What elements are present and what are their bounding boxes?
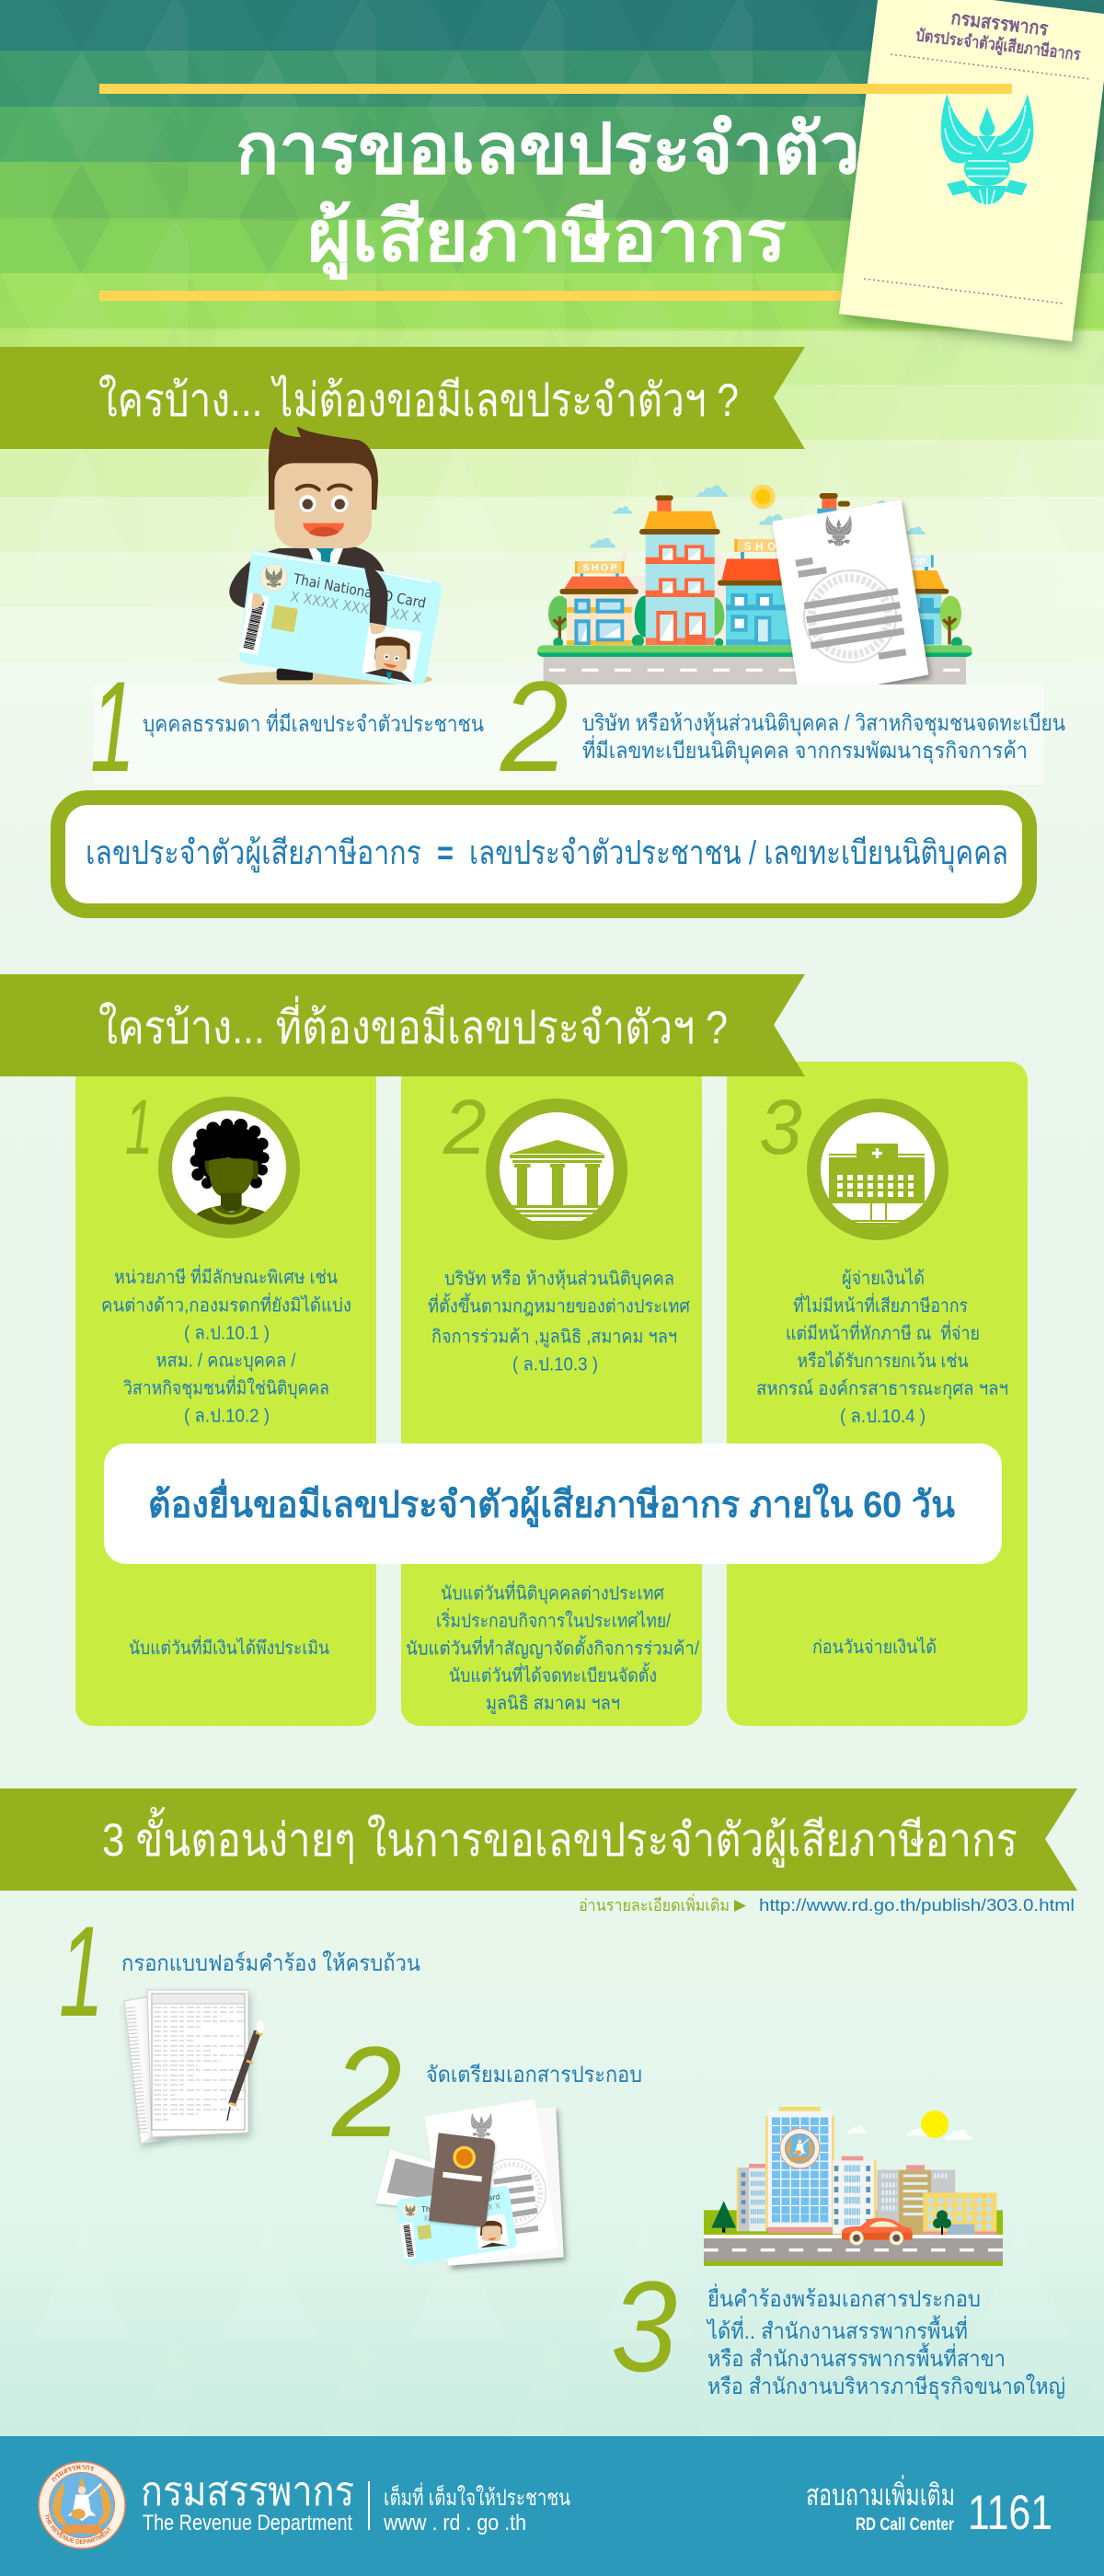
icon: man holding national id card: Thai National ID Card — [292, 570, 427, 612]
title: ผู้เสียภาษีอากร — [307, 198, 787, 280]
title — [236, 110, 860, 280]
text: deadline start: นับแต่วันที่มีเงินได้พึงประเมิน — [129, 1635, 329, 1659]
pale strip behind numbered notes — [93, 684, 1044, 785]
formula callout — [51, 790, 1037, 918]
link: read more — [579, 1893, 1075, 1915]
panel: income payers — [727, 1062, 1028, 1726]
step 3: 3 — [611, 2254, 677, 2398]
icon: garuda emblem — [941, 94, 1033, 207]
card heading: กรมสรรพากร — [949, 6, 1050, 40]
tax id card document — [839, 0, 1104, 341]
step 3: หรือ สำนักงานสรรพากรพื้นที่สาขา — [707, 2342, 1006, 2372]
icon: revenue department seal — [38, 2461, 126, 2549]
section banner: who must apply — [0, 974, 805, 1076]
department name: The Revenue Department — [143, 2511, 352, 2536]
text: description: บริษัท หรือ ห้างหุ้นส่วนนิติบุคคล — [444, 1269, 674, 1290]
panel: foreign companies — [401, 1062, 702, 1726]
deadline callout — [104, 1443, 1002, 1564]
text: description: ที่ตั้งขึ้นตามกฎหมายของต่างประเทศ — [428, 1294, 690, 1317]
number 3: 3 — [759, 1084, 802, 1170]
icon: revenue office city scene — [704, 2107, 1003, 2266]
text: description — [101, 1264, 351, 1427]
step 1: กรอกแบบฟอร์มคำร้อง ให้ครบถ้วน — [121, 1950, 420, 1976]
panel: special tax units — [75, 1062, 376, 1726]
text: description: สหกรณ์ องค์กรสาธารณะกุศล ฯลฯ — [756, 1378, 1008, 1400]
lower yellow title bar — [99, 291, 854, 301]
call center: RD Call Center — [856, 2515, 954, 2535]
text: description: หสม. / คณะบุคคล / — [156, 1351, 296, 1373]
note 2: companies and partnerships — [500, 654, 1065, 799]
icon: shops and company registration paper: OP — [912, 557, 926, 568]
deadline callout: ต้องยื่นขอมีเลขประจำตัวผู้เสียภาษีอากร ภายใน 60 วัน — [148, 1478, 955, 1527]
text: deadline start — [406, 1581, 699, 1715]
formula callout: = — [437, 834, 454, 871]
icon: man holding national id card — [218, 426, 442, 688]
text: description: ( ล.ป.10.3 ) — [512, 1354, 598, 1374]
text: deadline start: มูลนิธิ สมาคม ฯลฯ — [486, 1694, 620, 1715]
text: deadline start: นับแต่วันที่ได้จดทะเบียนจัดตั้ง — [449, 1662, 657, 1686]
text: description: แต่มีหน้าที่หักภาษี ณ ที่จ่าย — [786, 1320, 980, 1344]
text: description: คนต่างด้าว,กองมรดกที่ยังมิได้แบ่ง — [101, 1292, 351, 1316]
icon: revenue department seal: กรมสรรพากร — [52, 2465, 94, 2482]
text: deadline start: นับแต่วันที่นิติบุคคลต่างประเทศ — [441, 1581, 664, 1605]
icon: documents, house book and id card: X X — [488, 2202, 501, 2212]
step 3 — [611, 2107, 1065, 2400]
text: deadline start: นับแต่วันที่ทำสัญญาจัดตั้งกิจการร่วมค้า/ — [406, 1636, 699, 1660]
text: description: กิจการร่วมค้า ,มูลนิธิ ,สมาคม ฯลฯ — [431, 1327, 677, 1348]
department name: กรมสรรพากร — [141, 2469, 354, 2514]
text: description: วิสาหกิจชุมชนที่มิใช่นิติบุคคล — [123, 1375, 329, 1400]
section banner: who does not need to apply: ใครบ้าง... ไม่ต้องขอมีเลขประจำตัวฯ ? — [98, 374, 739, 426]
text: description: หน่วยภาษี ที่มีลักษณะพิเศษ เช่น — [114, 1264, 338, 1288]
icon: bank building — [493, 1106, 620, 1233]
icon: documents, house book and id card: X — [423, 2214, 429, 2223]
link: read more: http://www.rd.go.th/publish/303.0.html — [759, 1896, 1075, 1915]
icon: person with afro — [166, 1104, 293, 1231]
call center: 1161 — [968, 2486, 1052, 2540]
note 1: natural person — [90, 654, 484, 799]
number 2: 2 — [443, 1084, 487, 1170]
text: description — [756, 1268, 1008, 1427]
icon: revenue department seal: THE REVENUE DEPARTMENT — [44, 2513, 111, 2544]
text: description: ที่ไม่มีหน้าที่เสียภาษีอากร — [793, 1293, 968, 1317]
note 1: natural person: บุคคลธรรมดา ที่มีเลขประจำตัวประชาชน — [143, 708, 484, 738]
text: deadline start: ก่อนวันจ่ายเงินได้ — [812, 1637, 937, 1658]
section banner: who does not need to apply — [0, 347, 805, 449]
slogan and website: www . rd . go .th — [383, 2511, 526, 2536]
section banner: three steps — [0, 1788, 1077, 1891]
footer — [0, 2436, 1104, 2576]
icon: documents, house book and id card: ard — [488, 2192, 500, 2202]
icon: man holding national id card: X XXXX XXXXX XX X — [289, 589, 423, 627]
title: การขอเลขประจำตัว — [236, 110, 860, 189]
text: description: หรือได้รับการยกเว้น เช่น — [797, 1351, 969, 1372]
icon: forms and pen — [124, 1990, 264, 2144]
formula callout: เลขประจำตัวผู้เสียภาษีอากร — [86, 834, 421, 873]
step 1: 1 — [59, 1899, 104, 2043]
text: description: ( ล.ป.10.4 ) — [840, 1407, 926, 1427]
step 2: 2 — [331, 2019, 402, 2164]
text: description: ( ล.ป.10.1 ) — [184, 1323, 270, 1343]
section banner: who must apply: ใครบ้าง... ที่ต้องขอมีเลขประจำตัวฯ ? — [98, 996, 728, 1053]
text: description — [428, 1269, 690, 1374]
note 2: companies and partnerships: ที่มีเลขทะเบียนนิติบุคคล จากกรมพัฒนาธุรกิจการค้า — [582, 735, 1028, 765]
text: deadline start: เริ่มประกอบกิจการในประเทศไทย/ — [436, 1608, 671, 1632]
call center: สอบถามเพิ่มเติม — [806, 2475, 955, 2512]
note 2: companies and partnerships: 2 — [500, 654, 569, 799]
slogan and website — [383, 2482, 570, 2536]
step 3: ได้ที่.. สำนักงานสรรพากรพื้นที่ — [706, 2315, 968, 2344]
text: description: ( ล.ป.10.2 ) — [184, 1407, 270, 1427]
link: read more: อ่านรายละเอียดเพิ่มเติม — [579, 1893, 730, 1915]
upper yellow title bar — [99, 84, 1012, 94]
icon: documents, house book and id card: Th — [420, 2205, 431, 2214]
icon: shops and company registration paper: SHO — [744, 540, 776, 553]
slogan and website: เต็มที่ เต็มใจให้ประชาชน — [384, 2482, 570, 2511]
step 3: หรือ สำนักงานบริหารภาษีธุรกิจขนาดใหญ่ — [707, 2374, 1065, 2400]
icon: shops and company registration paper: SHOP — [582, 563, 617, 574]
step 2 — [331, 2019, 642, 2266]
text: description: ผู้จ่ายเงินได้ — [842, 1268, 925, 1290]
number 1: 1 — [125, 1084, 153, 1170]
step 1 — [59, 1899, 420, 2144]
department name — [141, 2469, 354, 2536]
icon: shops and company registration paper — [537, 485, 972, 685]
icon: documents, house book and id card — [375, 2099, 564, 2266]
call center — [806, 2475, 1052, 2540]
icon: hospital building — [813, 1106, 943, 1233]
step 3: ยื่นคำร้องพร้อมเอกสารประกอบ — [707, 2283, 981, 2312]
step 2: จัดเตรียมเอกสารประกอบ — [426, 2063, 642, 2087]
note 1: natural person: 1 — [90, 654, 135, 799]
